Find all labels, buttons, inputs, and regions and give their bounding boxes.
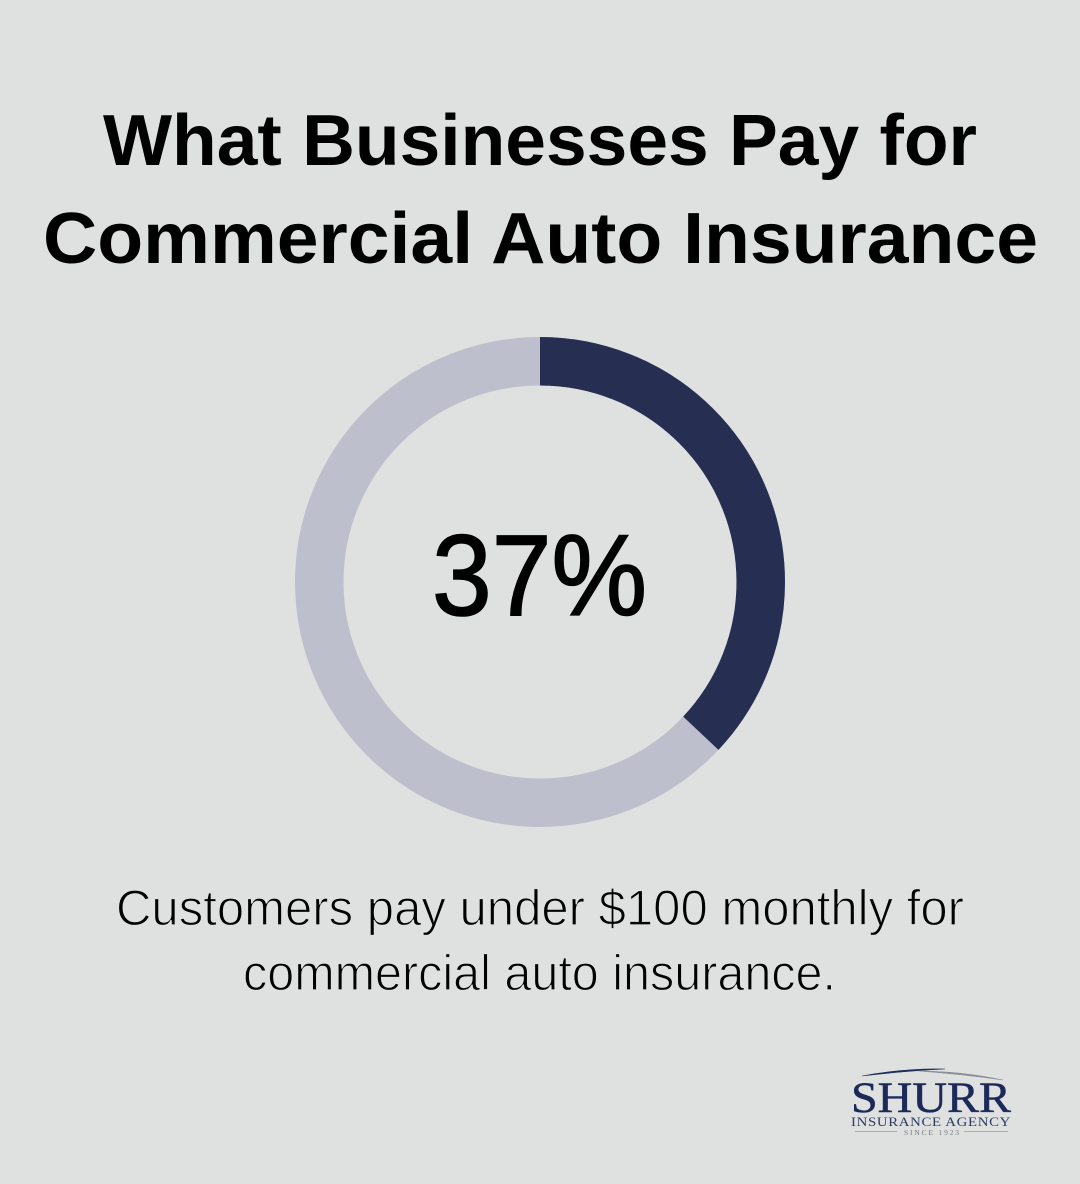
title: [43, 101, 1038, 279]
logo: Shurr Insurance Agency: [851, 1069, 1011, 1137]
logo since line: SINCE 1923: [904, 1128, 959, 1137]
title: Commercial Auto Insurance: [43, 199, 1038, 279]
logo wordmark: SHURR: [851, 1075, 1011, 1122]
caption: Customers pay under $100 monthly for: [116, 880, 964, 936]
icon: logo arc: [862, 1069, 1003, 1080]
title: What Businesses Pay for: [103, 101, 977, 181]
caption: [116, 880, 964, 1001]
donut chart: 37%: [319, 361, 761, 803]
caption: commercial auto insurance.: [243, 945, 836, 1001]
donut value: 37%: [432, 512, 647, 640]
logo subtitle: INSURANCE AGENCY: [851, 1114, 1011, 1129]
